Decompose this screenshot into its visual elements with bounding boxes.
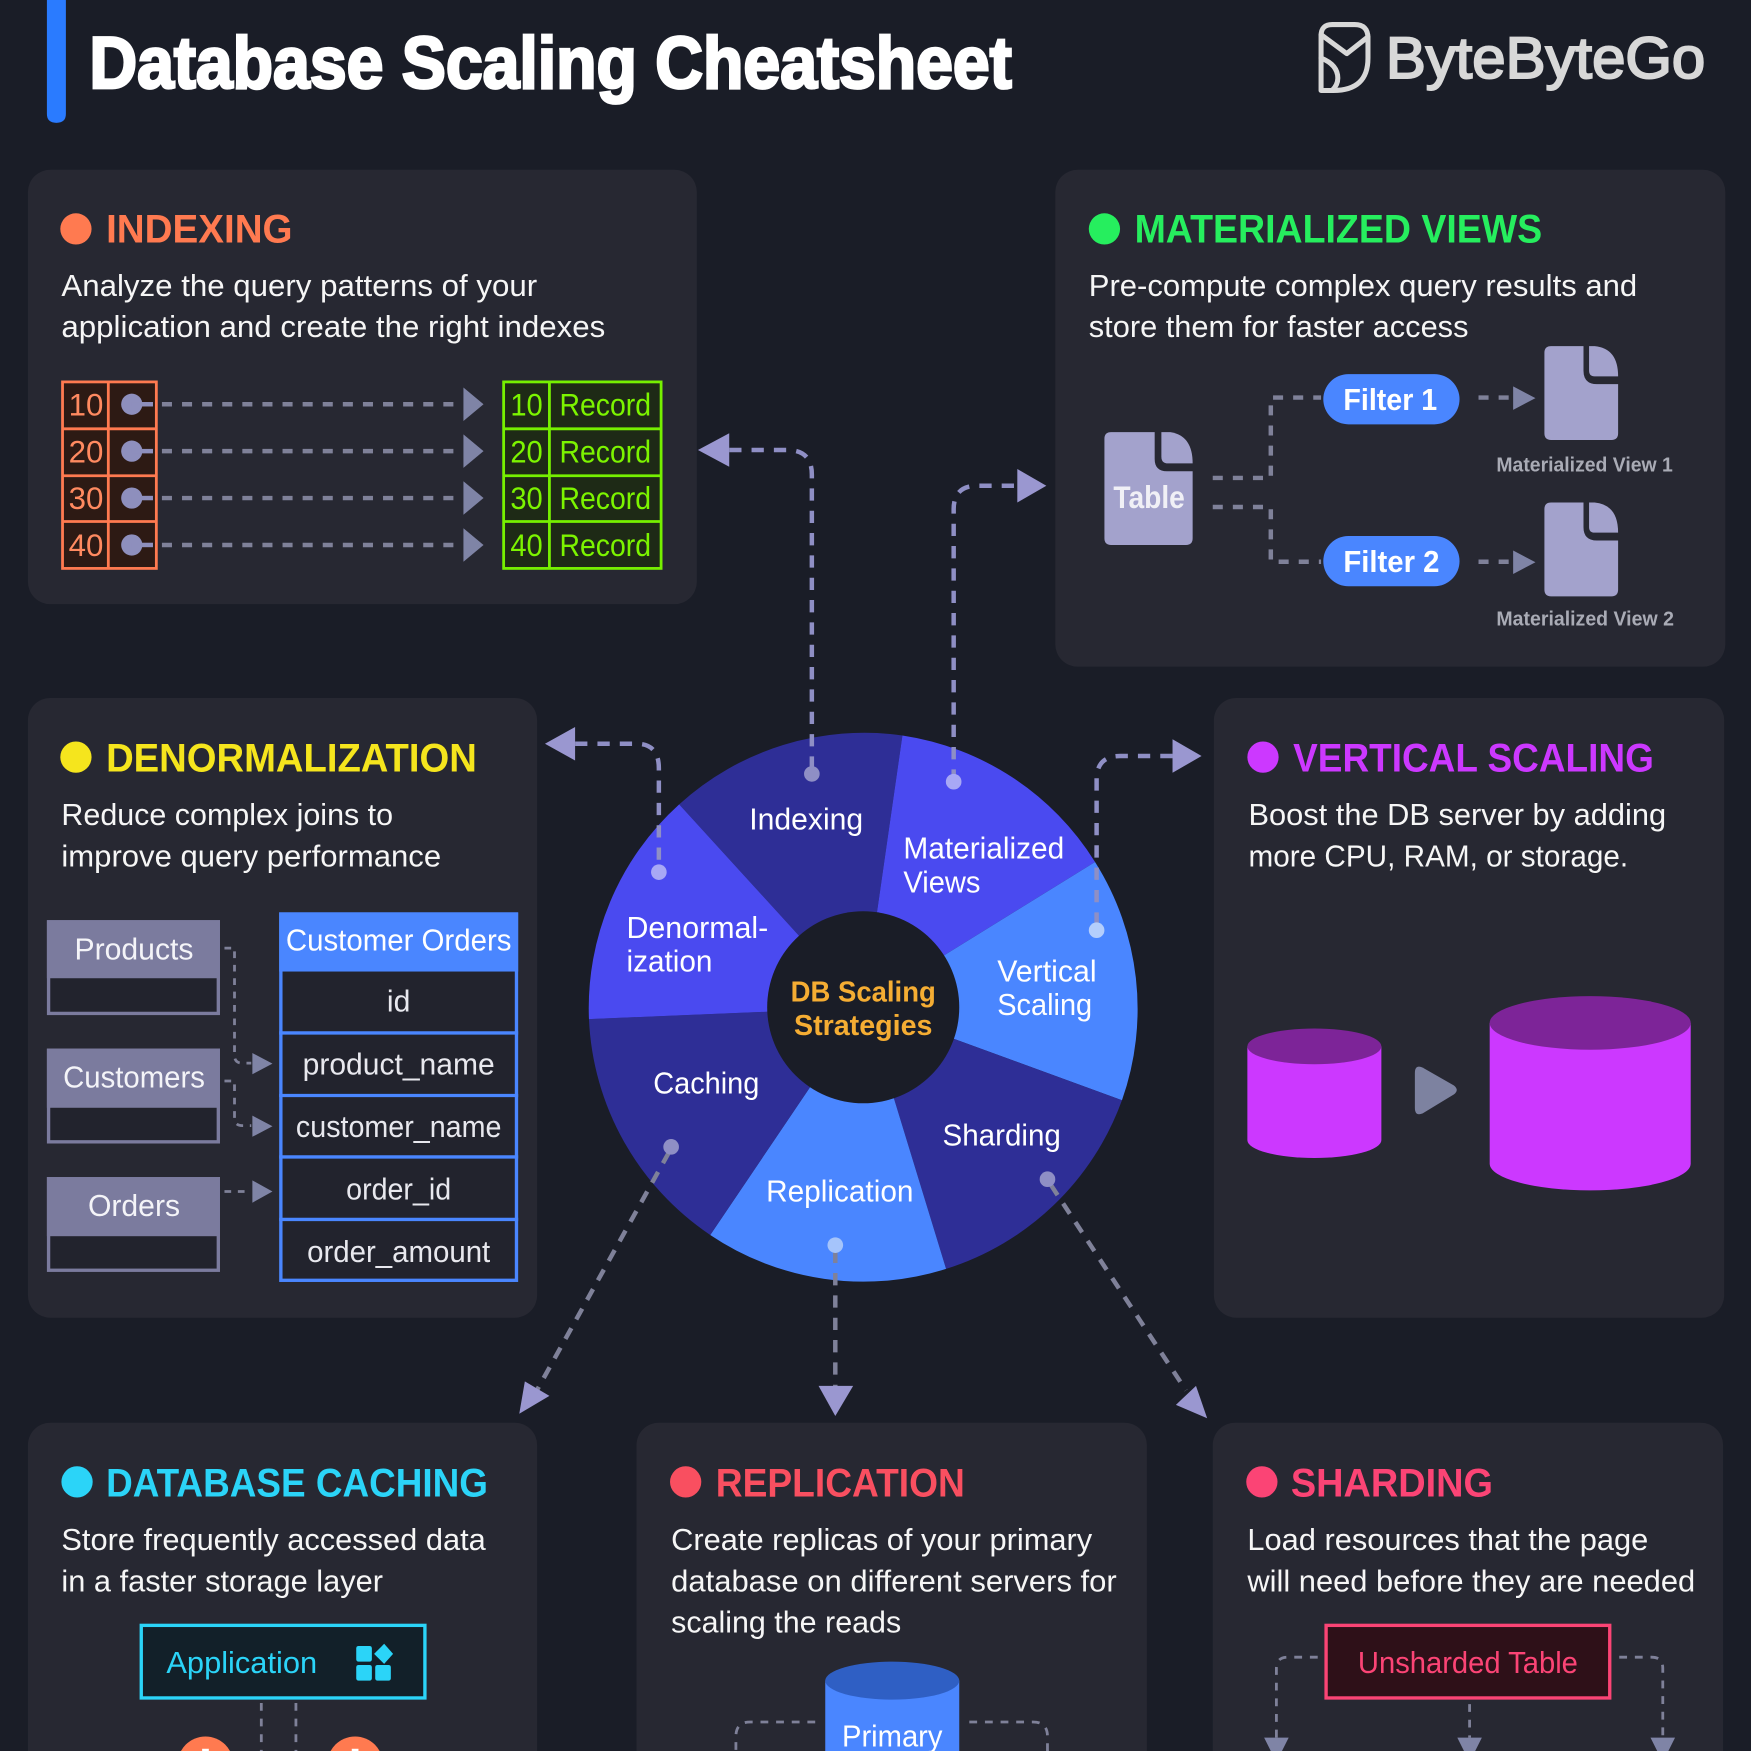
- record table: Record: [559, 387, 651, 422]
- icon: view 1 document: [1544, 346, 1618, 440]
- title accent bar: [47, 0, 66, 123]
- center hub: [767, 911, 959, 1103]
- heading dot: [61, 1466, 93, 1498]
- segment: caching: [589, 1007, 863, 1235]
- icon: app grid: [356, 1644, 393, 1681]
- logo: ByteByteGo: [1321, 25, 1705, 91]
- cache nodes: [178, 1736, 383, 1751]
- segment labels: [626, 804, 1097, 1209]
- description: database on different servers for: [671, 1565, 1117, 1598]
- panel background: [637, 1423, 1147, 1751]
- segment labels: Materialized: [903, 833, 1064, 866]
- panel: database caching: [28, 1423, 537, 1751]
- description: Reduce complex joins to: [61, 799, 393, 832]
- index table: 30: [69, 481, 103, 516]
- table: customers: Customers: [63, 1062, 205, 1095]
- segment labels: Indexing: [749, 804, 863, 837]
- table: customers: [47, 1049, 220, 1142]
- icon: owl logo: [1321, 25, 1368, 90]
- arrow: donut to replication: [819, 1237, 853, 1416]
- description: [61, 270, 605, 344]
- panel: denormalization: [28, 698, 537, 1318]
- panel: replication: [637, 1423, 1147, 1751]
- index table: 10: [69, 387, 103, 422]
- arrow: donut to vertical scaling: [1089, 739, 1202, 938]
- panel: sharding: [1213, 1423, 1723, 1751]
- description: application and create the right indexes: [61, 311, 605, 344]
- application box: Application: [166, 1647, 317, 1680]
- arrow: donut to denormalization: [545, 727, 667, 880]
- heading: VERTICAL SCALING: [1293, 736, 1654, 781]
- segment: replication: [710, 1007, 946, 1282]
- description: Store frequently accessed data: [61, 1524, 486, 1557]
- panel: materialized views: [1055, 170, 1725, 667]
- heading dot: [670, 1466, 701, 1498]
- logo wordmark: ByteByteGo: [1386, 26, 1705, 91]
- record table: 10: [510, 387, 543, 422]
- segment labels: Denormal-: [626, 912, 768, 945]
- icon: primary database: [825, 1662, 959, 1751]
- segment labels: ization: [626, 946, 712, 979]
- panel background: [1055, 170, 1725, 667]
- icon: large database: [1490, 996, 1691, 1190]
- heading dot: [1247, 741, 1279, 773]
- panel background: [1213, 1423, 1723, 1751]
- segment: materialized views: [863, 735, 1095, 1007]
- filter 1 pill: [1323, 374, 1460, 424]
- panel background: [28, 698, 537, 1318]
- unsharded table box: [1326, 1625, 1610, 1698]
- icon: view 2 document: [1544, 503, 1618, 596]
- filter 2 pill: Filter 2: [1343, 546, 1439, 579]
- panel background: [28, 170, 697, 604]
- heading dot: [1089, 213, 1120, 245]
- description: Pre-compute complex query results and: [1089, 270, 1637, 303]
- table: customer orders: order_id: [346, 1173, 451, 1206]
- connector arrows: [224, 948, 272, 1203]
- heading dot: [60, 741, 92, 773]
- table: orders: [47, 1177, 220, 1270]
- filter 1 pill: Filter 1: [1343, 384, 1437, 417]
- description: store them for faster access: [1089, 311, 1468, 344]
- connectors to filters: [1213, 398, 1321, 562]
- description: Boost the DB server by adding: [1248, 799, 1666, 832]
- arrows to views: [1479, 386, 1535, 574]
- description: Create replicas of your primary: [671, 1524, 1093, 1557]
- panel background: [28, 1423, 537, 1751]
- record table: [504, 382, 661, 568]
- table: orders: Orders: [88, 1190, 180, 1223]
- heading: REPLICATION: [716, 1460, 965, 1505]
- description: Analyze the query patterns of your: [61, 270, 537, 303]
- arrow: donut to indexing: [698, 433, 820, 782]
- heading: SHARDING: [1291, 1460, 1493, 1505]
- heading: DATABASE CACHING: [106, 1460, 488, 1505]
- center label: DB Scaling: [791, 977, 936, 1009]
- pointer arrows: [162, 387, 484, 562]
- icon: table document: [1104, 432, 1193, 545]
- segment labels: Sharding: [943, 1120, 1061, 1153]
- description: [1089, 270, 1637, 344]
- application box: [141, 1625, 425, 1698]
- description: Load resources that the page: [1247, 1524, 1648, 1557]
- arrow: donut to sharding: [1040, 1171, 1207, 1418]
- connectors: [1264, 1657, 1675, 1751]
- icon: table document: Table: [1113, 480, 1185, 515]
- title: Database Scaling Cheatsheet: [89, 21, 1012, 104]
- panel: vertical scaling: [1214, 698, 1724, 1318]
- label: view 2: Materialized View 2: [1496, 608, 1674, 630]
- description: [61, 1524, 486, 1598]
- table: customer orders: customer_name: [296, 1111, 501, 1144]
- label: view 1: Materialized View 1: [1496, 454, 1673, 476]
- table: customer orders: id: [387, 986, 410, 1019]
- record table: Record: [559, 434, 651, 469]
- description: [61, 799, 441, 874]
- segment labels: Scaling: [997, 989, 1092, 1022]
- connectors: [261, 1703, 296, 1751]
- arrow: donut to caching: [519, 1139, 679, 1414]
- description: improve query performance: [61, 841, 441, 874]
- segment labels: Replication: [766, 1176, 913, 1209]
- filter 2 pill: [1323, 536, 1460, 586]
- description: will need before they are needed: [1246, 1565, 1695, 1598]
- table: products: [47, 920, 220, 1013]
- arrow: scale up: [1415, 1067, 1457, 1114]
- arrow: donut to materialized views: [946, 469, 1046, 790]
- index table: 20: [69, 434, 103, 469]
- heading dot: [1246, 1466, 1278, 1498]
- heading: MATERIALIZED VIEWS: [1135, 206, 1542, 251]
- index table: [63, 382, 156, 568]
- record table: 40: [510, 528, 543, 563]
- unsharded table box: Unsharded Table: [1358, 1647, 1578, 1680]
- table: customer orders: order_amount: [307, 1236, 491, 1269]
- segment: denormalization: [589, 804, 863, 1019]
- record table: Record: [559, 481, 651, 516]
- description: [1246, 1524, 1695, 1598]
- record table: 20: [510, 434, 543, 469]
- heading dot: [60, 213, 92, 245]
- segment labels: Vertical: [997, 956, 1097, 989]
- donut chart: DB scaling strategies: [589, 733, 1138, 1282]
- description: more CPU, RAM, or storage.: [1248, 841, 1628, 874]
- table: customer orders: Customer Orders: [286, 924, 511, 957]
- description: [1248, 799, 1666, 874]
- center label: Strategies: [794, 1010, 932, 1042]
- table: customer orders: product_name: [303, 1048, 495, 1081]
- description: [671, 1524, 1117, 1640]
- segment labels: Caching: [653, 1067, 759, 1100]
- record table: 30: [510, 481, 543, 516]
- index table: 40: [69, 528, 103, 563]
- connectors: [736, 1722, 1047, 1751]
- center label: [791, 977, 936, 1042]
- segment: indexing: [679, 733, 902, 1007]
- panel: indexing: [28, 170, 697, 604]
- heading: DENORMALIZATION: [106, 736, 477, 781]
- heading: INDEXING: [106, 206, 293, 251]
- description: in a faster storage layer: [61, 1565, 383, 1598]
- segment labels: Views: [903, 866, 980, 899]
- segment: vertical scaling: [863, 862, 1138, 1100]
- icon: small database: [1247, 1028, 1381, 1158]
- panel background: [1214, 698, 1724, 1318]
- table: products: Products: [75, 933, 193, 966]
- table: customer orders: [279, 912, 518, 1280]
- description: scaling the reads: [671, 1607, 901, 1640]
- record table: Record: [559, 528, 651, 563]
- segment: sharding: [863, 1007, 1122, 1269]
